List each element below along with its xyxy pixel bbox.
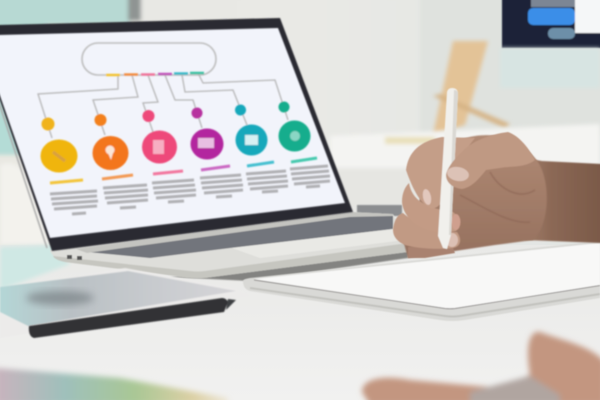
connector lines bbox=[38, 73, 288, 138]
keyboard bbox=[87, 216, 393, 258]
table bbox=[0, 245, 600, 400]
laptop base bbox=[50, 212, 408, 278]
item 6 green bbox=[278, 102, 310, 152]
table shadow under laptop bbox=[170, 250, 408, 281]
middle nail bbox=[452, 214, 460, 230]
forearm bbox=[525, 158, 600, 243]
wooden stand bbox=[433, 41, 510, 135]
item 2 orange bbox=[92, 114, 128, 170]
item 5 teal bbox=[235, 104, 268, 156]
pen shade bbox=[449, 90, 458, 235]
background monitor bbox=[502, 0, 600, 48]
lid silver edge bbox=[0, 100, 47, 248]
front edge bbox=[53, 243, 408, 278]
white pen bbox=[438, 88, 458, 249]
hinge strip bbox=[76, 212, 393, 253]
middle finger bbox=[402, 183, 460, 232]
ring nail bbox=[446, 233, 458, 247]
left drawing tablet bbox=[0, 268, 250, 338]
laptop screen bbox=[0, 28, 345, 238]
laptop lid bbox=[0, 18, 353, 251]
tablet surface bbox=[254, 243, 600, 308]
background white desk bbox=[330, 124, 600, 208]
ring finger bbox=[393, 213, 460, 249]
item 4 purple bbox=[190, 108, 224, 160]
item 1 yellow bbox=[40, 118, 78, 172]
trackpad reflection bbox=[232, 229, 405, 258]
index nail bbox=[421, 188, 433, 206]
connector pill bbox=[82, 43, 216, 75]
tablet shadow bbox=[26, 291, 94, 305]
laptop bbox=[0, 18, 408, 278]
colored pill segments bbox=[106, 73, 204, 75]
color swatches bbox=[0, 368, 228, 400]
index finger bbox=[406, 137, 475, 208]
blurred foreground hand bbox=[362, 332, 600, 400]
tablet front dark seam bbox=[254, 280, 600, 309]
hand with pen bbox=[393, 88, 600, 258]
black stylus bbox=[29, 298, 236, 338]
writing tablet bbox=[243, 241, 600, 321]
monitor stand reflection bbox=[500, 48, 600, 88]
thumb bbox=[446, 132, 535, 189]
palm bbox=[403, 135, 547, 258]
hand creases bbox=[460, 172, 535, 222]
background wall bbox=[0, 0, 600, 255]
spiral notebook bbox=[357, 205, 402, 216]
teal table reflection bbox=[0, 245, 70, 290]
tablet edge bbox=[243, 241, 600, 321]
tablet edge highlight bbox=[250, 288, 600, 316]
item 3 pink bbox=[142, 110, 177, 164]
thumb nail bbox=[446, 165, 470, 183]
screen infographic bbox=[38, 43, 330, 214]
pinky bbox=[408, 245, 455, 258]
item heading bars bbox=[50, 158, 317, 183]
item text blocks bbox=[50, 166, 330, 214]
ports bbox=[67, 255, 72, 259]
